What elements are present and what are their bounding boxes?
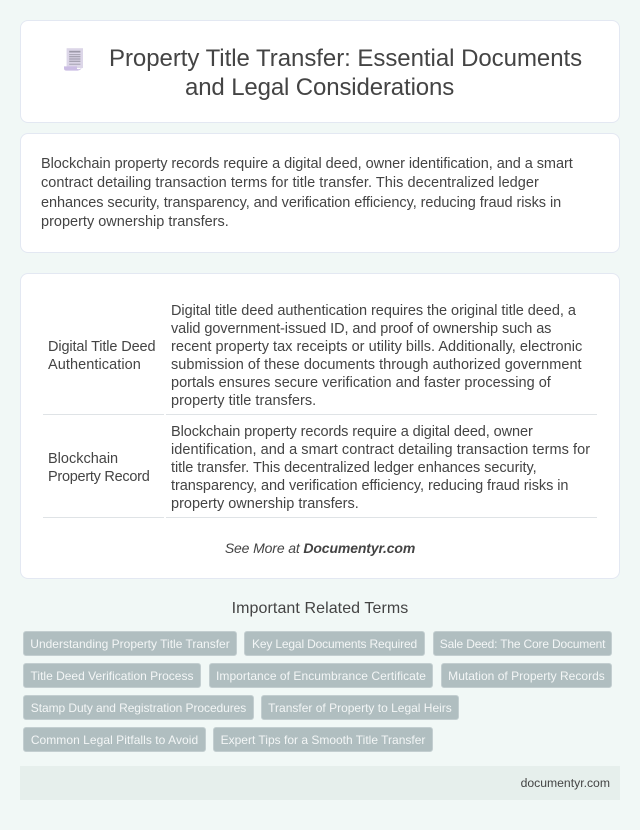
tag (441, 663, 612, 688)
row: digital title deed authentication: Digital title deed authentication requires the original title deed, a (171, 303, 576, 319)
tag (213, 727, 433, 752)
footer text: documentyr.com (521, 776, 610, 790)
row: digital title deed authentication: recent property tax receipts or utility bills. Additionally, electronic (171, 339, 582, 355)
row: digital title deed authentication: Digital Title Deed (48, 339, 155, 355)
tag: Title Deed Verification Process (31, 669, 193, 683)
tag (433, 631, 612, 656)
tag: Expert Tips for a Smooth Title Transfer (221, 733, 425, 747)
icon: document scroll (64, 48, 83, 71)
tag (23, 727, 206, 752)
title: and Legal Considerations (185, 74, 454, 101)
row: blockchain property record: Property Record (48, 469, 150, 485)
tag: Importance of Encumbrance Certificate (216, 669, 426, 683)
summary text: contract detailing transaction terms for title transfer. This decentralized ledger (41, 175, 539, 191)
row: digital title deed authentication: Authentication (48, 357, 141, 373)
panel: summary card (20, 133, 620, 253)
tag (209, 663, 433, 688)
tag (23, 631, 237, 656)
row: digital title deed authentication: portals ensures secure verification and faster processing of (171, 375, 551, 391)
row: blockchain property record: title transfer. This decentralized ledger enhances security, (171, 460, 537, 476)
tag: Key Legal Documents Required (252, 637, 417, 651)
summary text (41, 156, 573, 230)
see more link: See More at Documentyr.com (225, 540, 415, 556)
row: digital title deed authentication: valid government-issued ID, and proof of ownership such as (171, 321, 551, 337)
summary text: Blockchain property records require a digital deed, owner identification, and a smart (41, 156, 573, 172)
row: blockchain property record (48, 424, 590, 512)
row: blockchain property record: Blockchain (48, 451, 118, 467)
panel: header card (20, 20, 620, 123)
tag: Transfer of Property to Legal Heirs (268, 701, 452, 715)
heading: important related terms: Important Related Terms (232, 600, 408, 617)
tag (23, 695, 254, 720)
tag (261, 695, 459, 720)
footer bar (20, 766, 620, 800)
tag: Mutation of Property Records (448, 669, 605, 683)
tags: related terms (23, 631, 612, 752)
row: digital title deed authentication: submission of these documents through authorized government (171, 357, 582, 373)
tag: Sale Deed: The Core Document (440, 637, 605, 651)
tag: Understanding Property Title Transfer (30, 637, 230, 651)
row: digital title deed authentication (48, 303, 582, 409)
summary text: property ownership transfers. (41, 214, 229, 230)
summary text: enhances security, transparency, and verification efficiency, reducing fraud risks in (41, 195, 561, 211)
row: digital title deed authentication: property title transfers. (171, 393, 316, 409)
tag: Common Legal Pitfalls to Avoid (31, 733, 198, 747)
row: blockchain property record: identification, and a smart contract detailing transaction terms for (171, 442, 590, 458)
tag (23, 663, 201, 688)
tag (244, 631, 425, 656)
title: Property Title Transfer: Essential Documents (109, 45, 582, 72)
row: blockchain property record: property ownership transfers. (171, 496, 359, 512)
row: blockchain property record: transparency, and verification efficiency, reducing fraud risks in (171, 478, 568, 494)
row: blockchain property record: Blockchain property records require a digital deed, owner (171, 424, 533, 440)
tag: Stamp Duty and Registration Procedures (31, 701, 246, 715)
title (109, 45, 582, 101)
panel: documents table card (20, 273, 620, 579)
